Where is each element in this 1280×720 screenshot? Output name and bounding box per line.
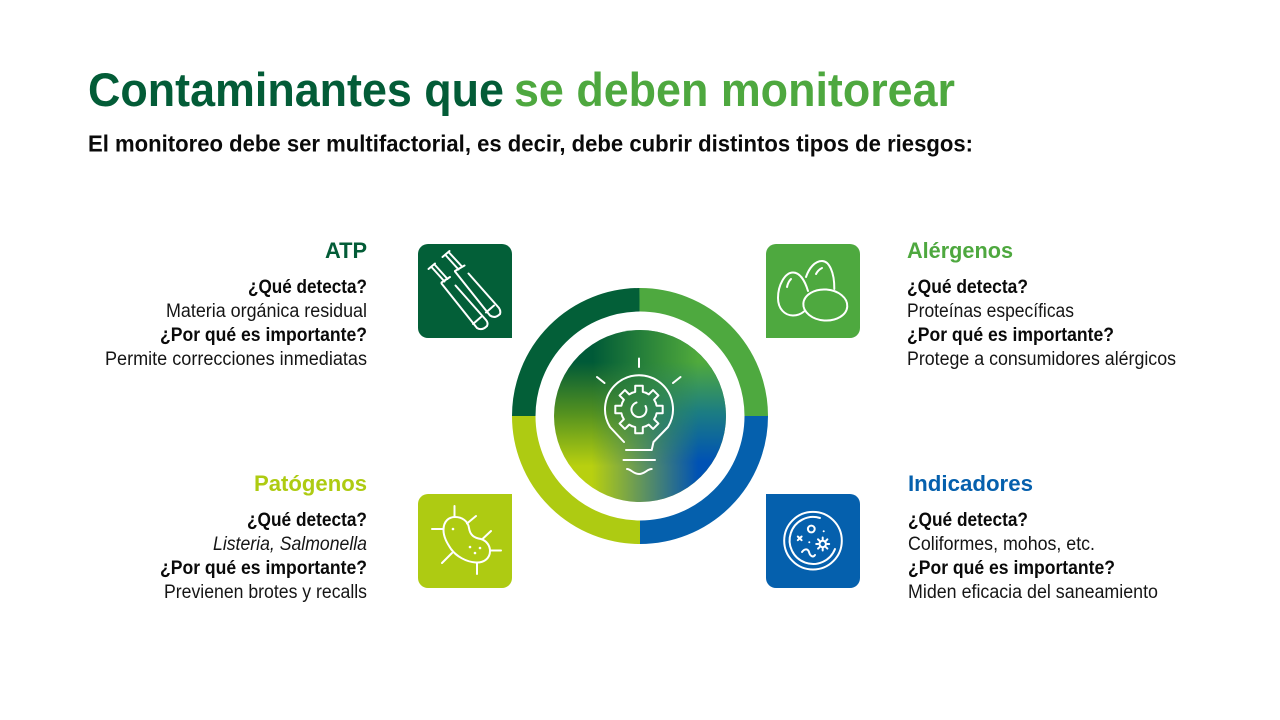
icon: ATP swabs: [418, 244, 512, 338]
heading: Alérgenos: Alérgenos: [907, 238, 1013, 263]
panel: Indicadores text: [908, 471, 1158, 603]
heading: Patógenos: Patógenos: [254, 471, 367, 496]
text: Indicadores details: Miden eficacia del saneamiento: [908, 582, 1158, 603]
text: Alérgenos details: [907, 277, 1176, 370]
ring segment: Indicadores: [640, 416, 756, 532]
text: Patógenos details: [160, 510, 367, 603]
ring segment: Alérgenos: [640, 300, 756, 416]
heading: Indicadores: Indicadores: [908, 471, 1033, 496]
central gradient disc: [554, 330, 726, 502]
panel: Patógenos text: [160, 471, 367, 603]
text: Indicadores details: ¿Qué detecta?: [908, 510, 1028, 531]
text: ATP details: Materia orgánica residual: [166, 301, 367, 322]
text: Patógenos details: Listeria, Salmonella: [213, 534, 367, 555]
ring segment: ATP: [524, 300, 640, 416]
icon: light bulb with gear: [597, 358, 680, 474]
title: se deben monitorear: [514, 63, 955, 116]
icon: bacterium: [418, 494, 512, 588]
panel: ATP text: [105, 238, 367, 370]
text: Patógenos details: Previenen brotes y recalls: [164, 582, 367, 603]
panel: Alérgenos text: [907, 238, 1176, 370]
chart: segmented ring: [524, 300, 756, 532]
text: Alérgenos details: Proteínas específicas: [907, 301, 1074, 322]
text: Indicadores details: ¿Por qué es importante?: [908, 558, 1115, 579]
icon: eggs: [766, 244, 860, 338]
text: ATP details: [105, 277, 367, 370]
text: ATP details: Permite correcciones inmediatas: [105, 349, 367, 370]
heading: ATP: ATP: [325, 238, 367, 263]
ring segment: Patógenos: [524, 416, 640, 532]
subtitle: El monitoreo debe ser multifactorial, es decir, debe cubrir distintos tipos de riesgos:: [88, 130, 973, 156]
icon: petri dish: [766, 494, 860, 588]
text: Alérgenos details: ¿Qué detecta?: [907, 277, 1028, 298]
text: Indicadores details: [908, 510, 1158, 603]
text: Indicadores details: Coliformes, mohos, etc.: [908, 534, 1095, 555]
text: Alérgenos details: ¿Por qué es importante?: [907, 325, 1114, 346]
text: Alérgenos details: Protege a consumidores alérgicos: [907, 349, 1176, 370]
text: ATP details: ¿Por qué es importante?: [160, 325, 367, 346]
title: Contaminantes que: [88, 63, 504, 116]
text: Patógenos details: ¿Por qué es importante?: [160, 558, 367, 579]
text: ATP details: ¿Qué detecta?: [248, 277, 367, 298]
text: Patógenos details: ¿Qué detecta?: [247, 510, 367, 531]
title: [88, 63, 955, 116]
